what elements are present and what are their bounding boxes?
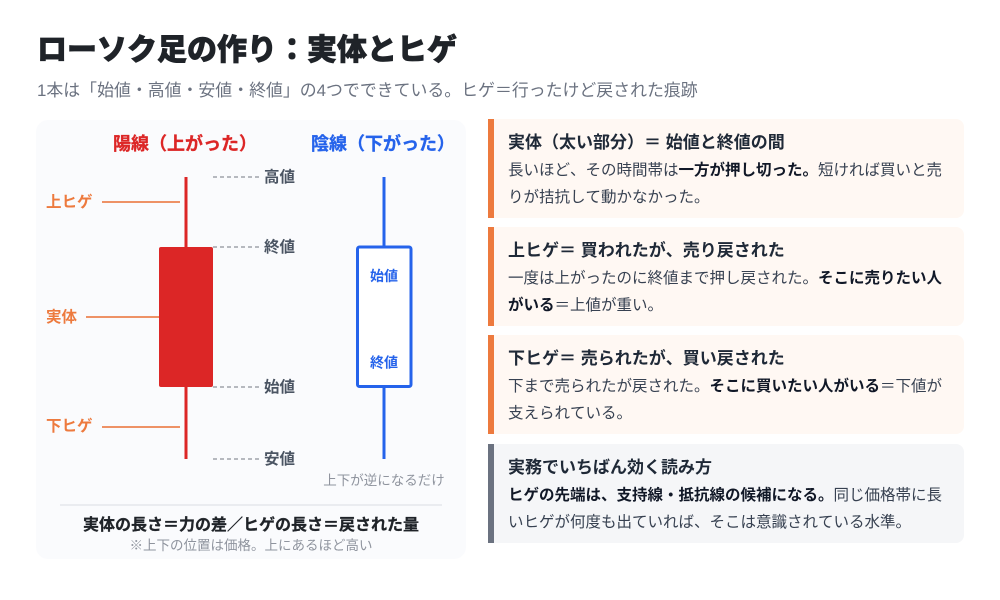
card heading: 実体（太い部分）＝ 始値と終値の間: [508, 133, 785, 152]
card text: 支えられている。: [508, 405, 632, 422]
card text: いヒゲが何度も出ていれば、そこは意識されている水準。: [508, 514, 911, 531]
price labels: 高値: [264, 168, 295, 186]
card text: 一度は上がったのに終値まで押し戻された。そこに売りたい人: [508, 270, 942, 287]
card heading: 実務でいちばん効く読み方: [508, 458, 712, 477]
card: upper wick: [488, 227, 964, 326]
bearish candle: [358, 177, 411, 459]
part labels: 下ヒゲ: [46, 416, 93, 435]
part labels: [46, 192, 180, 435]
card heading: 上ヒゲ＝ 買われたが、売り戻された: [508, 241, 785, 260]
bearish candle: 始値: [370, 268, 398, 284]
card: body: [488, 119, 964, 218]
price labels: 終値: [264, 238, 295, 256]
card text: 下まで売られたが戻された。そこに買いたい人がいる＝下値が: [508, 378, 942, 395]
part labels: 実体: [46, 308, 78, 326]
card text: りが拮抗して動かなかった。: [508, 189, 710, 206]
price labels: [213, 168, 295, 468]
bearish candle: 終値: [370, 354, 398, 370]
note: reversed: 上下が逆になるだけ: [323, 473, 445, 488]
card text: [508, 162, 942, 206]
card text: ヒゲの先端は、支持線・抵抗線の候補になる。同じ価格帯に長: [508, 487, 942, 504]
price labels: 始値: [264, 378, 295, 396]
card text: がいる＝上値が重い。: [508, 297, 663, 314]
footnote: ※上下の位置は価格。上にあるほど高い: [130, 537, 372, 553]
card text: [508, 270, 942, 314]
card text: [508, 378, 942, 422]
heading: bullish candle: 陽線（上がった）: [113, 133, 257, 154]
summary: 実体の長さ＝力の差／ヒゲの長さ＝戻された量: [83, 515, 419, 534]
title: ローソク足の作り：実体とヒゲ: [37, 34, 457, 67]
bullish candle: [159, 177, 213, 459]
card text: [508, 486, 942, 531]
card text: 長いほど、その時間帯は一方が押し切った。短ければ買いと売: [508, 162, 942, 179]
subtitle: 1本は「始値・高値・安値・終値」の4つでできている。ヒゲ＝行ったけど戻された痕跡: [37, 81, 698, 100]
heading: bearish candle: 陰線（下がった）: [311, 133, 455, 154]
card heading: 下ヒゲ＝ 売られたが、買い戻された: [508, 349, 785, 368]
panel: candlestick diagram: [46, 133, 455, 553]
part labels: 上ヒゲ: [46, 192, 93, 211]
price labels: 安値: [264, 449, 295, 468]
card: practical reading: [488, 444, 964, 543]
card: lower wick: [488, 335, 964, 434]
